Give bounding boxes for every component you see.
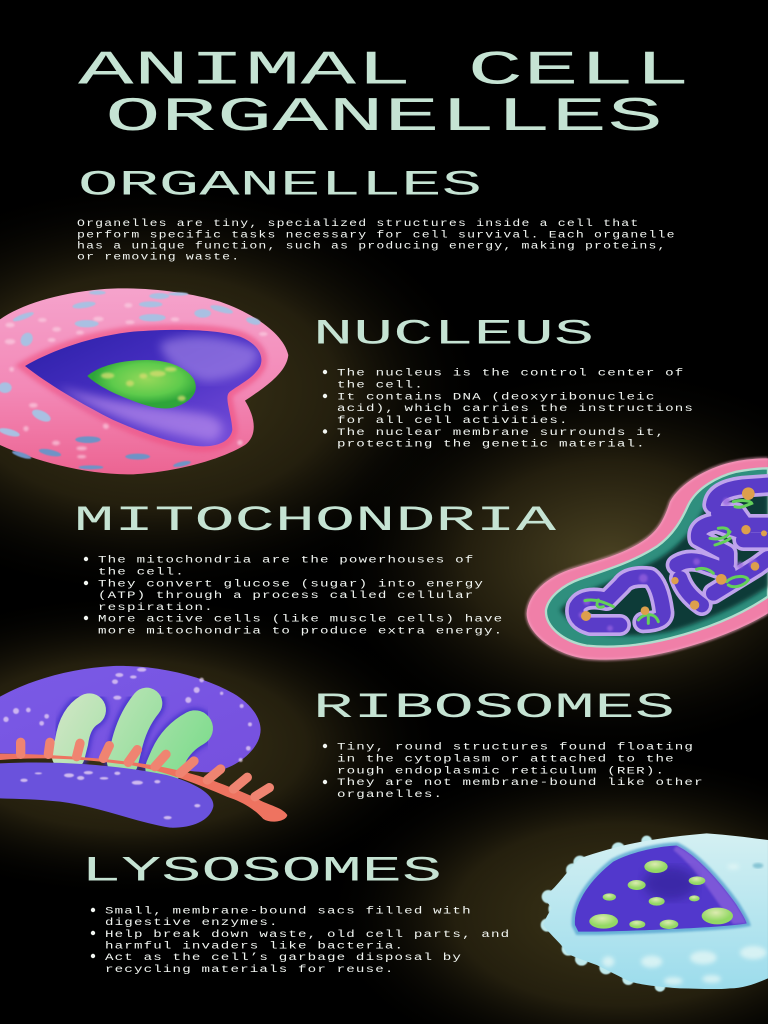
mitochondria bullets: More active cells (like muscle cells) have <box>98 613 503 625</box>
mitochondria bullets: The mitochondria are the powerhouses of <box>98 554 474 566</box>
title <box>78 44 690 145</box>
intro text: Organelles are tiny, specialized structures inside a cell that <box>77 217 639 229</box>
ribosomes bullets: Tiny, round structures found floating <box>337 741 694 753</box>
lysosomes bullets <box>91 905 510 975</box>
mitochondria bullets: the cell. <box>98 566 185 578</box>
nucleus bullets <box>323 367 694 450</box>
heading: ribosomes: RIBOSOMES <box>313 688 675 728</box>
mitochondria bullets <box>84 554 503 637</box>
heading: organelles: ORGANELLES <box>78 166 482 206</box>
ribosomes bullets <box>323 741 704 800</box>
lysosomes bullets: Small, membrane-bound sacs filled with <box>105 905 472 917</box>
nucleus bullets: the cell. <box>337 379 424 391</box>
nucleus bullets: It contains DNA (deoxyribonucleic <box>337 391 655 403</box>
nucleus bullets: for all cell activities. <box>337 415 569 426</box>
mitochondria bullets: (ATP) through a process called cellular <box>98 590 474 601</box>
heading: nucleus: NUCLEUS <box>313 314 594 354</box>
nucleus bullets: The nucleus is the control center of <box>337 367 684 379</box>
illustration: mitochondrion <box>527 458 768 660</box>
mitochondria bullets: more mitochondria to produce extra energy. <box>98 625 503 637</box>
ribosomes bullets: They are not membrane-bound like other <box>337 777 704 788</box>
ribosomes bullets: in the cytoplasm or attached to the <box>337 753 675 765</box>
illustration: ribosomes on endoplasmic reticulum <box>0 666 287 828</box>
mitochondria bullets: respiration. <box>98 601 214 613</box>
lysosomes bullets: Act as the cell’s garbage disposal by <box>105 952 462 963</box>
nucleus bullets: The nuclear membrane surrounds it, <box>337 426 665 438</box>
heading: mitochondria: MITOCHONDRIA <box>74 501 556 541</box>
intro text: has a unique function, such as producing energy, making proteins, <box>77 240 667 252</box>
intro text: or removing waste. <box>77 251 240 263</box>
illustration: nucleus <box>0 288 288 474</box>
ribosomes bullets: rough endoplasmic reticulum (RER). <box>337 765 665 777</box>
lysosomes bullets: digestive enzymes. <box>105 917 279 928</box>
heading: lysosomes: LYSOSOMES <box>81 852 442 892</box>
nucleus bullets: acid), which carries the instructions <box>337 403 694 415</box>
intro text: perform specific tasks necessary for cell survival. Each organelle <box>77 229 676 241</box>
title: ANIMAL CELL <box>78 44 690 98</box>
lysosomes bullets: harmful invaders like bacteria. <box>105 940 404 952</box>
nucleus bullets: protecting the genetic material. <box>337 438 646 450</box>
lysosomes bullets: Help break down waste, old cell parts, and <box>105 928 510 940</box>
illustration: lysosome <box>541 833 768 992</box>
intro text <box>77 217 676 263</box>
title: ORGANELLES <box>105 91 663 145</box>
lysosomes bullets: recycling materials for reuse. <box>105 963 395 975</box>
ribosomes bullets: organelles. <box>337 788 443 800</box>
mitochondria bullets: They convert glucose (sugar) into energy <box>98 578 484 590</box>
